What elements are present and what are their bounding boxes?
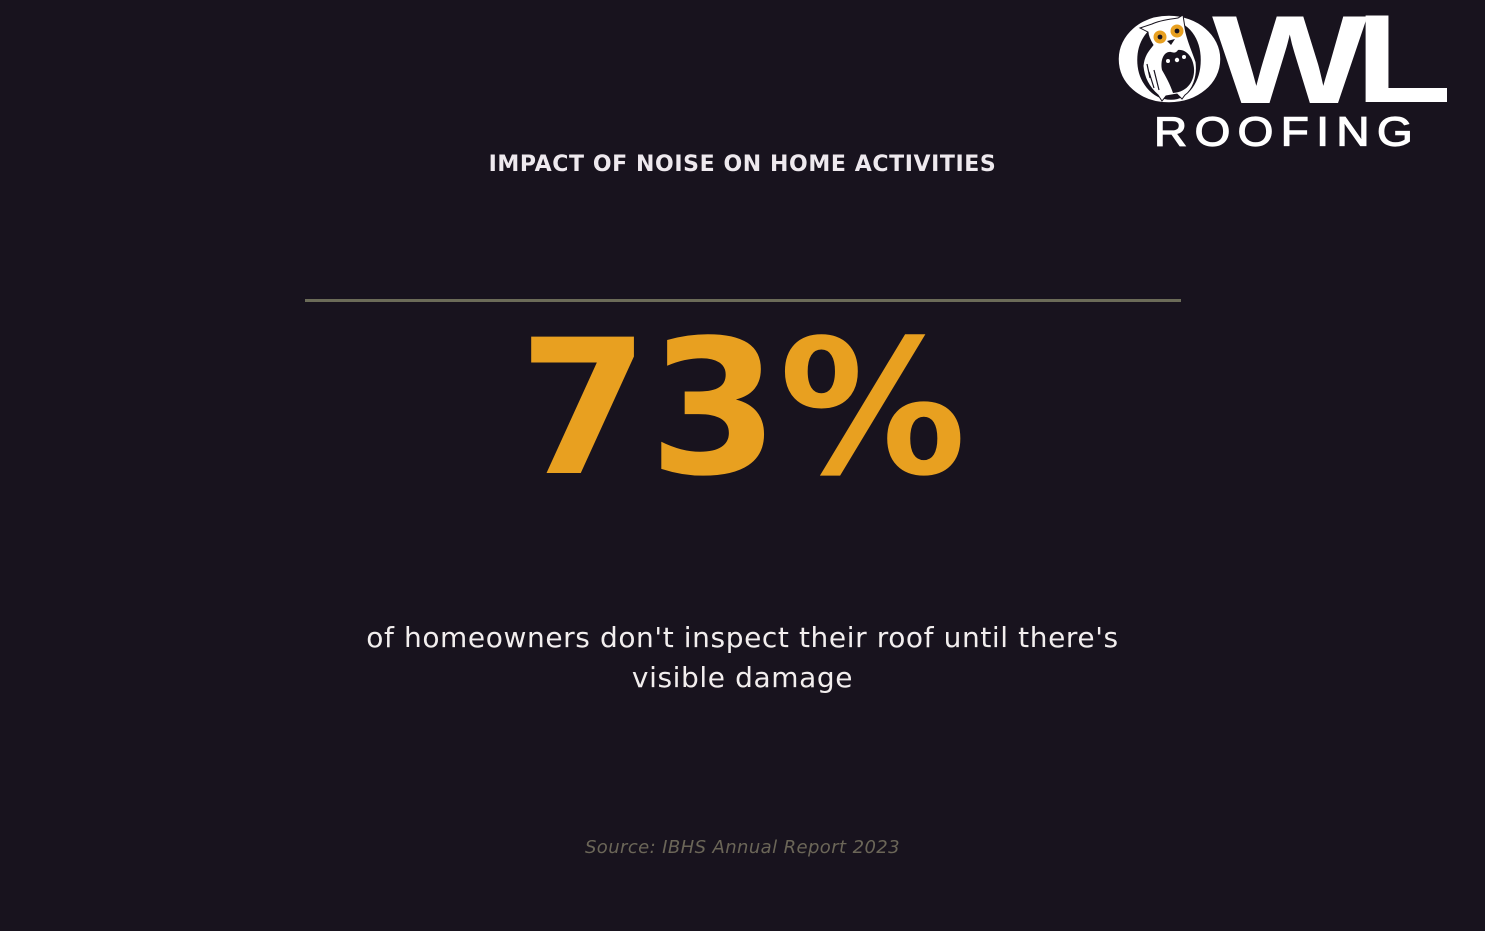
icon: owl inside letter O: [1118, 15, 1221, 103]
logo: Owl Roofing: [1118, 0, 1452, 155]
logo wordmark: ROOFING: ROOFING: [1154, 110, 1413, 155]
title: IMPACT OF NOISE ON HOME ACTIVITIES: [489, 152, 996, 177]
logo wordmark: WL: [1212, 0, 1452, 130]
divider line: [305, 299, 1181, 302]
description text: [366, 621, 1119, 694]
big statistic: 73%: 73%: [519, 300, 966, 518]
description text: of homeowners don't inspect their roof until there's: [366, 621, 1119, 654]
description text: visible damage: [632, 661, 853, 694]
source note: Source: IBHS Annual Report 2023: [585, 837, 900, 858]
